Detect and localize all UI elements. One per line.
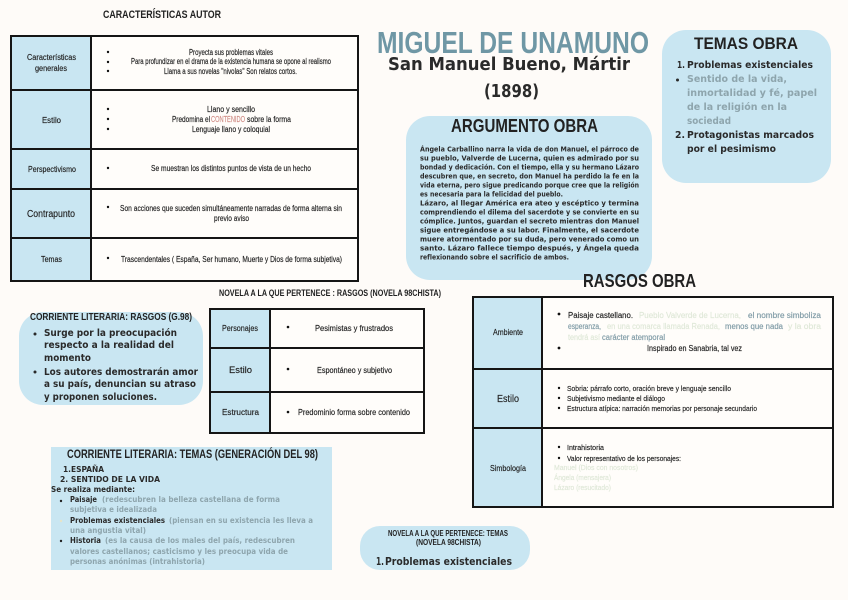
- row: temas: [41, 255, 342, 264]
- panel: novela temas: [360, 526, 530, 570]
- row: estructura: Predominio forma sobre contenido: [298, 408, 410, 417]
- text block: argumento: descubren que, en secreto, don Manuel ha perdido la fe en la: [420, 172, 639, 180]
- text block: argumento: reflexionando sobre el sacrificio de ambos.: [420, 254, 569, 262]
- list: temas: Sentido de la vida,: [687, 74, 787, 85]
- row: estilo: Estructura atípica: narración memorias por personaje secundario: [567, 404, 757, 413]
- row: estilo: Estilo: [42, 116, 62, 125]
- panel: corriente literaria rasgos: [19, 312, 203, 405]
- row: simbología: Ángela (mensajera): [554, 473, 611, 482]
- row: estructura: Estructura: [222, 408, 260, 417]
- heading: novela temas: [388, 529, 509, 547]
- text block: argumento: santo. Lázaro fallece tiempo después, y Ángela queda: [420, 244, 639, 252]
- list: temas: 2.: [675, 130, 685, 141]
- heading: características autor: CARACTERÍSTICAS AUTOR: [103, 8, 221, 21]
- panel: temas obra: [662, 30, 831, 183]
- row: estilo: sobre la forma: [247, 115, 291, 124]
- row: simbología: Valor representativo de los personajes:: [567, 456, 681, 463]
- row: características generales: generales: [35, 64, 67, 73]
- row: ambiente: carácter atemporal: [602, 333, 665, 342]
- text block: argumento: cómplice. Juntos, guardan el secreto mientras don Manuel: [420, 218, 639, 226]
- list: temas generación: [51, 464, 313, 566]
- list: temas generación: subjetiva e idealizada: [70, 505, 157, 514]
- heading: corriente rasgos: CORRIENTE LITERARIA: RASGOS (G.98): [30, 312, 192, 323]
- row: ambiente: en una comarca llamada Renada,: [607, 322, 720, 331]
- row: simbología: Intrahistoria: [567, 445, 604, 452]
- row: estilo: [497, 384, 757, 413]
- row: estilo: Lenguaje llano y coloquial: [192, 125, 270, 134]
- list: temas: por el pesimismo: [687, 144, 776, 155]
- row: temas: Temas: [41, 255, 62, 264]
- panel: argumento obra: [406, 116, 652, 280]
- list: temas: inmortalidad y fé, papel: [687, 87, 817, 99]
- list: temas generación: personas anónimas (intrahistoria): [70, 556, 205, 566]
- row: contrapunto: Contrapunto: [27, 209, 75, 220]
- list: novela temas: Problemas existenciales: [385, 556, 512, 568]
- row: estilo: Estilo: [229, 365, 252, 376]
- heading: novela rasgos: NOVELA A LA QUE PERTENECE : RASGOS (NOVELA 98CHISTA): [219, 288, 441, 298]
- text block: argumento: Ángela Carballino narra la vida de don Manuel, el párroco de: [420, 144, 639, 154]
- list: temas generación: Paisaje: [70, 495, 97, 504]
- row: simbología: [490, 445, 681, 492]
- row: características generales: Llama a sus novelas "nivolas" Son relatos cortos.: [164, 67, 297, 76]
- row: contrapunto: previo aviso: [214, 214, 249, 223]
- list: temas generación: 1.ESPAÑA: [63, 464, 105, 474]
- row: ambiente: y la obra: [788, 322, 822, 331]
- text block: argumento: bondad y dedicación. Con el tiempo, ella y su hermano Lázaro: [420, 164, 639, 172]
- row: ambiente: Pueblo Valverde de Lucerna,: [639, 311, 741, 320]
- row: personajes: [222, 324, 393, 333]
- row: estilo: [229, 365, 392, 376]
- row: contrapunto: [27, 204, 342, 223]
- list: temas: Protagonistas marcados: [687, 130, 814, 141]
- row: estilo: Estilo: [497, 394, 519, 405]
- row: simbología: Manuel (Dios con nosotros): [554, 465, 638, 472]
- row: características generales: Características: [27, 53, 76, 62]
- table: rasgos obra: [473, 297, 833, 507]
- heading: argumento obra: ARGUMENTO OBRA: [451, 116, 598, 136]
- list: temas generación: 2. SENTIDO DE LA VIDA: [60, 475, 161, 484]
- table: características autor: [11, 36, 358, 281]
- list: temas: sociedad: [687, 116, 731, 127]
- subtitle: obra y año: (1898): [484, 81, 539, 102]
- list: rasgos: Los autores demostrarán amor: [44, 366, 198, 378]
- list: temas generación: (es la causa de los males del país, redescubren: [105, 536, 295, 545]
- list: rasgos: y proponen soluciones.: [44, 392, 157, 403]
- row: temas: Trascendentales ( España, Ser humano, Muerte y Dios de forma subjetiva): [121, 255, 342, 264]
- title: Miguel de Unamuno: MIGUEL DE UNAMUNO: [377, 25, 649, 60]
- heading: corriente temas: CORRIENTE LITERARIA: TEMAS (GENERACIÓN DEL 98): [67, 446, 318, 461]
- text block: argumento: sigue entregándose a su labor. Finalmente, el sacerdote: [420, 226, 639, 234]
- list: rasgos: respecto a la realidad del: [44, 340, 174, 351]
- list: temas generación: valores castellanos; casticismo y les preocupa vida de: [70, 547, 289, 556]
- row: estilo: Llano y sencillo: [207, 105, 255, 114]
- list: temas: Problemas existenciales: [687, 60, 813, 71]
- list: rasgos: [34, 327, 198, 403]
- subtitle: obra y año: San Manuel Bueno, Mártir: [388, 54, 630, 75]
- row: perspectivismo: Perspectivismo: [28, 165, 76, 174]
- text block: argumento: Lázaro, al llegar América era ateo y escéptico y termina: [420, 200, 639, 208]
- row: personajes: Pesimistas y frustrados: [315, 324, 393, 333]
- row: estilo: Predomina el: [172, 115, 210, 124]
- list: temas generación: una angustia vital): [70, 526, 146, 535]
- list: rasgos: a su país, denuncian su atraso: [44, 378, 196, 390]
- row: personajes: Personajes: [222, 324, 258, 333]
- list: temas generación: Se realiza mediante:: [51, 485, 135, 494]
- row: ambiente: el nombre simboliza: [748, 311, 822, 320]
- panel: corriente literaria temas: [51, 446, 332, 570]
- text block: argumento: vida eterna, pero sigue predicando porque cree que la religión: [420, 182, 639, 190]
- table: novela rasgos: [210, 309, 424, 433]
- row: características generales: Proyecta sus problemas vitales: [189, 48, 273, 57]
- list: novela temas: 1.: [376, 556, 384, 568]
- list: temas generación: Problemas existenciales: [70, 516, 165, 525]
- row: simbología: Lázaro (resucitado): [554, 485, 611, 492]
- row: estilo: Espontáneo y subjetivo: [317, 366, 392, 375]
- row: estilo: Sobria: párrafo corto, oración breve y lenguaje sencillo: [567, 384, 731, 393]
- list: temas generación: (piensan en su existencia les lleva a: [169, 516, 313, 525]
- text block: argumento: su pueblo, Valverde de Lucerna, quien es admirado por su: [420, 154, 639, 162]
- list: temas: [675, 60, 817, 155]
- list: temas: 1.: [677, 60, 685, 71]
- subtitle: obra y año: [388, 54, 630, 102]
- heading: novela temas: NOVELA A LA QUE PERTENECE: TEMAS: [388, 529, 509, 538]
- row: estilo: [42, 105, 291, 134]
- row: ambiente: menos que nada: [725, 322, 784, 331]
- row: estilo: Subjetivismo mediante el diálogo: [567, 394, 665, 403]
- list: temas generación: (redescubren la belleza castellana de forma: [102, 495, 280, 504]
- row: ambiente: tendrá así: [568, 333, 601, 342]
- row: estructura: [222, 408, 410, 417]
- list: temas: de la religión en la: [687, 101, 787, 113]
- row: características generales: Para profundizar en el drama de la existencia humana se opone al realismo: [131, 57, 331, 66]
- heading: temas obra: TEMAS OBRA: [694, 34, 798, 53]
- text block: argumento: comprendiendo el dilema del sacerdote y se convierte en su: [420, 208, 639, 216]
- heading: rasgos obra: RASGOS OBRA: [583, 271, 696, 291]
- row: características generales: [27, 48, 331, 76]
- row: contrapunto: Son acciones que suceden simultáneamente narradas de forma alterna sin: [120, 204, 342, 213]
- row: ambiente: Ambiente: [493, 328, 523, 337]
- heading: novela temas: (NOVELA 98CHISTA): [416, 538, 481, 547]
- list: rasgos: Surge por la preocupación: [44, 327, 177, 339]
- row: ambiente: [493, 311, 822, 353]
- text block: argumento: [420, 144, 639, 262]
- list: rasgos: momento: [44, 353, 91, 364]
- row: estilo: CONTENIDO: [211, 115, 245, 124]
- row: simbología: Simbología: [490, 464, 526, 473]
- text block: argumento: muere atormentado por su duda, pero venerado como un: [420, 236, 639, 244]
- row: ambiente: Paisaje castellano.: [568, 311, 633, 320]
- row: ambiente: Inspirado en Sanabria, tal vez: [647, 344, 742, 353]
- row: ambiente: esperanza,: [568, 322, 601, 331]
- row: perspectivismo: Se muestran los distintos puntos de vista de un hecho: [151, 164, 311, 173]
- row: perspectivismo: [28, 164, 311, 174]
- list: temas generación: Historia: [70, 536, 101, 545]
- text block: argumento: es necesaria para la felicidad del pueblo.: [420, 190, 563, 198]
